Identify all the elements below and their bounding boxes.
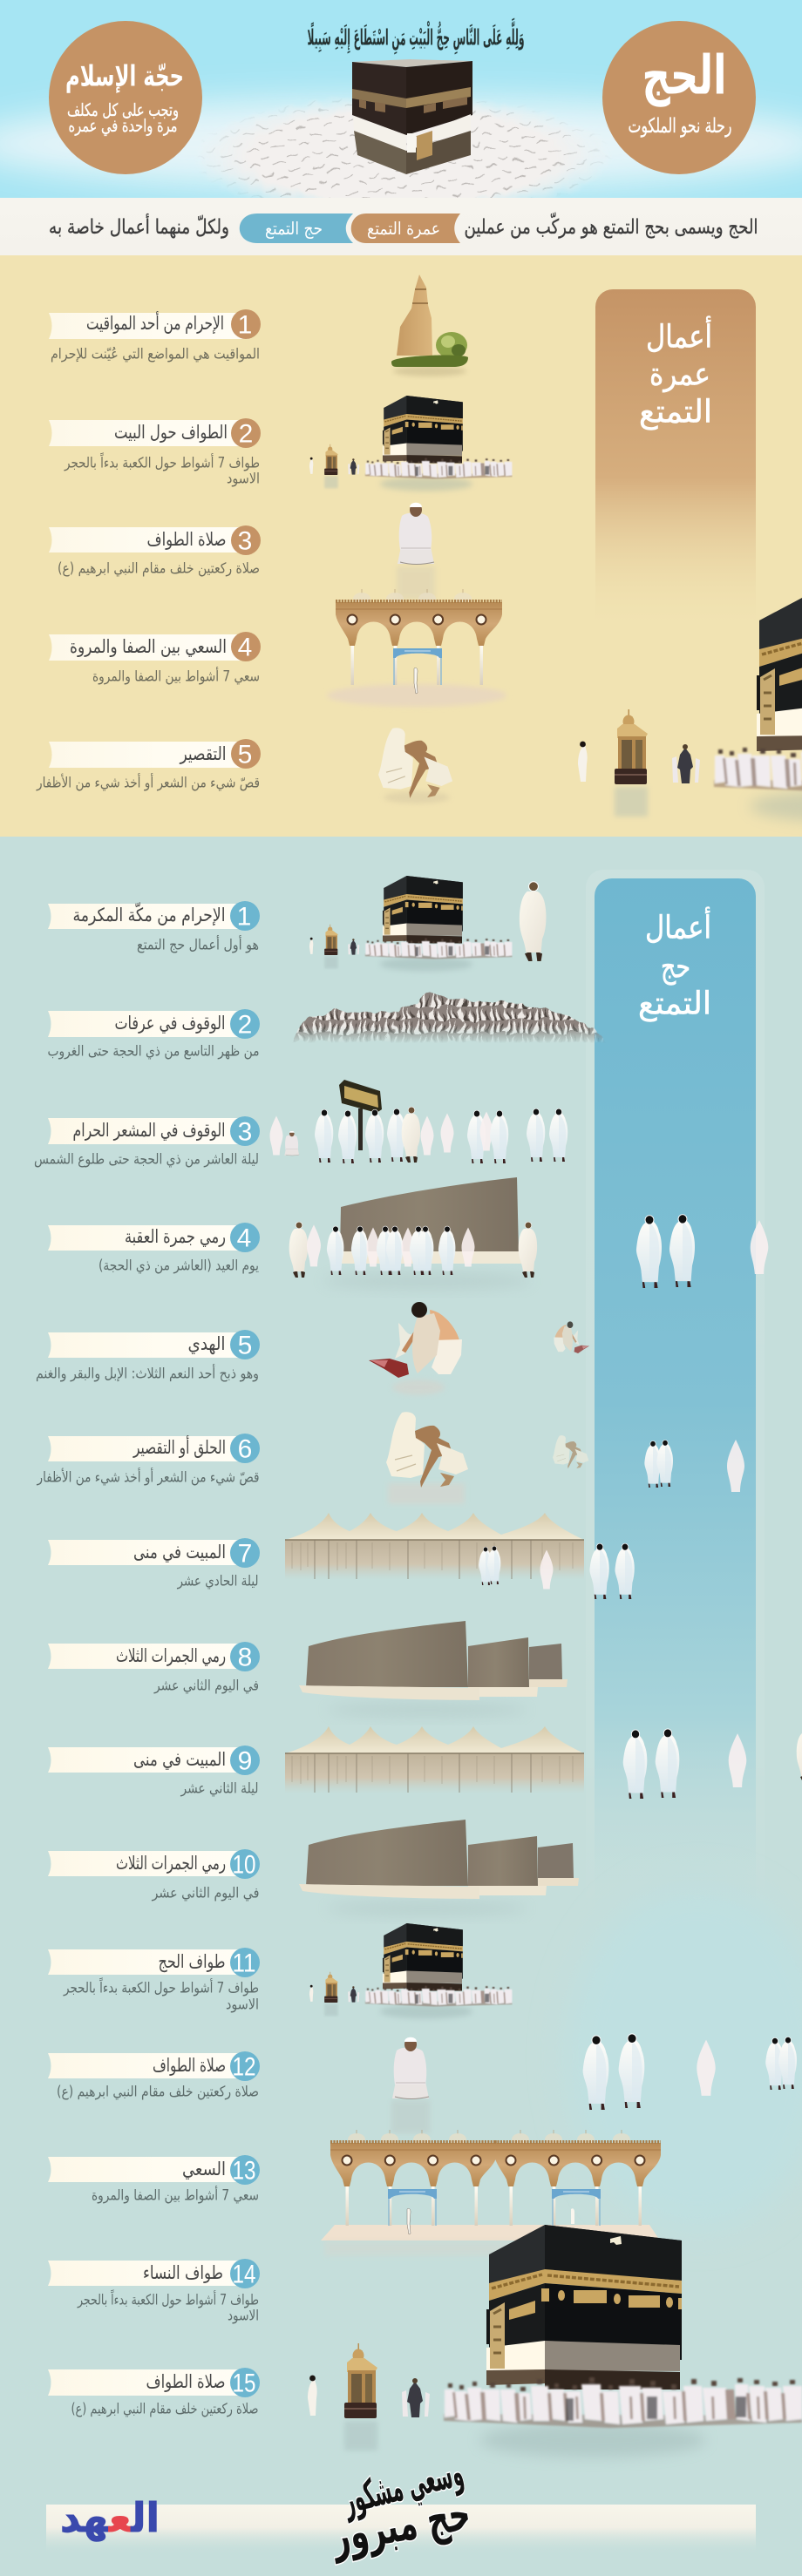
circle: Hajjat al-Islam [49,21,202,174]
step 7: 7 [238,1539,252,1569]
step 2 [49,418,261,488]
step 11: طواف الحج [159,1951,225,1972]
icon: large Kaaba with pilgrims [308,2225,802,2457]
step 14: الاسود [228,2308,259,2325]
icon: Muzdalifah sign [339,1080,382,1150]
figures: standing at Muzdalifah [270,1107,568,1163]
step 3: ليلة العاشر من ذي الحجة حتى طلوع الشمس [34,1150,259,1168]
pill: umrat al-tamattu: عمرة التمتع [367,218,440,239]
step 14: 14 [232,2261,256,2288]
step 4: السعي بين الصفا والمروة [70,636,227,657]
step 5 [36,1330,260,1382]
step 15 [48,2368,260,2417]
icon: praying man (step 12) [391,2037,430,2133]
step 1: 1 [238,310,252,340]
circle: Hajj title: الحج [642,44,727,106]
step 3: الوقوف في المشعر الحرام [73,1120,225,1141]
step 10: في اليوم الثاني عشر [152,1884,260,1901]
step 15: صلاة ركعتين خلف مقام النبي ابرهيم (ع) [71,2400,258,2417]
step 14: طواف النساء [143,2262,223,2283]
step 2: 2 [239,420,253,448]
pill: umrat al-tamattu [351,214,460,243]
icon: three Jamarat walls (step 10) [299,1820,579,1916]
step 6: 6 [238,1434,252,1464]
circle: Hajjat al-Islam: حجّة الإسلام [65,59,184,92]
panel: Hajj side panel [586,870,765,1929]
step 9 [48,1746,260,1797]
step 11: الاسود [226,1996,259,2013]
step 15: صلاة الطواف [146,2371,225,2392]
panel: Umrah side panel: التمتع [639,394,712,430]
step 12: 12 [232,2053,256,2081]
step 9: 9 [238,1746,252,1776]
icon: pilgrim walking [520,882,546,961]
pill: hajj al-tamattu: حج التمتع [265,218,323,239]
step 5: التقصير [180,743,227,764]
step 11 [48,1948,260,2013]
step 1: هو أول أعمال حج التمتع [137,934,259,953]
step 11: طواف 7 أشواط حول الكعبة بدءاً بالحجر [63,1977,259,1997]
icon: large Kaaba with pilgrims in the Umrah section [578,591,802,824]
step 7: ليلة الحادي عشر [177,1572,258,1590]
figures: pilgrims on the Hajj panel, step 9 [623,1726,802,1799]
icon: haircut (step 5) [378,728,452,803]
footer strip [46,2505,756,2555]
icon: haircut (hajj step 6) [386,1412,588,1504]
step 4: سعي 7 أشواط بين الصفا والمروة [92,666,260,685]
step 5: 5 [238,741,252,769]
icon: praying man (step 3) [397,503,435,600]
icon: small Kaaba with pilgrims (step 11) [309,1923,512,2018]
step 4 [48,1223,260,1274]
step 8: في اليوم الثاني عشر [153,1677,259,1694]
step 14: طواف 7 أشواط حول الكعبة بدءاً بالحجر [77,2289,259,2309]
pill: hajj al-tamattu [240,214,353,243]
step 4: 4 [238,633,252,662]
step 3: صلاة ركعتين خلف مقام النبي ابرهيم (ع) [58,559,260,577]
step 3: 3 [238,1117,252,1147]
step 13: 13 [232,2156,256,2186]
icon: small Kaaba with pilgrims (hajj step 1) [309,876,512,971]
calligraphy: Hajj greeting: حج مبرور [326,2485,474,2564]
step 9: ليلة الثاني عشر [180,1779,258,1797]
hajj steps [34,901,260,2417]
hero: white text strip [0,198,802,255]
step 5: قصّ شيء من الشعر أو أخذ شيء من الأظفار [36,772,260,791]
step 8: رمي الجمرات الثلاث [116,1645,226,1666]
step 2: الاسود [227,471,260,488]
step 2: من ظهر التاسع من ذي الحجة حتى الغروب [47,1042,260,1060]
step 1: الإحرام من مكّة المكرمة [73,901,225,925]
step 6: الحلق أو التقصير [133,1435,226,1458]
step 6: قصّ شيء من الشعر أو أخذ شيء من الأظفار [37,1468,260,1487]
icon: small Kaaba with pilgrims (step 2) [309,396,512,491]
icon: three Jamarat walls (step 8) [299,1621,568,1718]
step 3 [49,525,261,577]
step 3: صلاة الطواف [146,529,227,550]
step 4: يوم العيد (العاشر من ذي الحجة) [99,1257,259,1274]
icon: Mount Arafat [292,995,606,1042]
step 5 [36,739,261,791]
step 1: 1 [237,903,251,931]
intro sentence with pills: ولكلّ منهما أعمال خاصة به [49,214,229,239]
step 7 [48,1538,260,1590]
icon: Jamrat al-Aqaba wall with pilgrims [289,1177,537,1290]
step 13 [48,2155,260,2205]
step 1 [48,901,260,953]
panel: Hajj side panel: حج [661,950,690,985]
step 3: 3 [238,526,252,556]
step 8: 8 [238,1644,252,1671]
icon: sacrifice (step 5) [369,1302,589,1395]
hero: mosque floor around the Kaaba [200,99,607,198]
step 5: 5 [238,1332,252,1359]
step 2: الوقوف في عرفات [115,1013,225,1034]
circle: Hajjat al-Islam: وتجب على كل مكلف [67,99,179,120]
step 12: صلاة ركعتين خلف مقام النبي ابرهيم (ع) [57,2083,259,2100]
panel: Umrah side panel: عمرة [649,357,710,392]
circle: Hajj title: رحلة نحو الملكوت [628,115,732,138]
step 11: 11 [232,1949,256,1978]
panel: Hajj side panel: أعمال [645,906,711,946]
step 10 [48,1849,260,1901]
step 4: 4 [237,1224,251,1253]
panel: Hajj side panel: التمتع [638,986,711,1021]
step 2: طواف 7 أشواط حول الكعبة بدءاً بالحجر [64,452,260,472]
panel: Umrah side panel [595,289,756,632]
step 4: رمي جمرة العقبة [125,1226,226,1247]
step 5: الهدي [188,1333,225,1354]
step 4 [49,632,261,685]
calligraphy: Hajj greeting [326,2448,474,2564]
step 12: صلاة الطواف [153,2055,226,2076]
step 12 [48,2051,260,2100]
text: وسعي مشكور [337,2448,467,2523]
step 1: الإحرام من أحد المواقيت [86,311,224,334]
figures: pilgrims on the Hajj panel, step 6 [644,1440,744,1492]
step 5: وهو ذبح أحد النعم الثلاث: الإبل والبقر والغنم [36,1363,259,1382]
icon: Mina tents (step 7) [285,1513,584,1580]
panel: Umrah side panel: أعمال [646,315,712,356]
step 2: الطواف حول البيت [114,422,228,443]
step 13: سعي 7 أشواط بين الصفا والمروة [92,2186,259,2205]
icon: Mina tents (step 9) [285,1726,584,1793]
step 13: السعي [182,2159,226,2179]
step 10: 10 [232,1851,256,1879]
step 1 [49,309,261,363]
hero: Kaaba [352,59,472,174]
circle: Hajjat al-Islam: مرة واحدة في عمره [68,115,178,137]
step 1: المواقيت هي المواضع التي عُيّنت للإحرام [51,345,260,363]
icon: Safa and Marwa arcade (step 4) [327,589,506,707]
icon: Safa and Marwa long arcade (step 13) [321,2130,661,2256]
step 7: المبيت في منى [133,1542,226,1563]
step 2: 2 [238,1011,252,1039]
intro sentence with pills [49,213,758,243]
text: وَلِلَّهِ عَلَى النَّاسِ حِجُّ الْبَيْتِ مَنِ اسْتَطَاعَ إِلَيْهِ سَبِيلًا [307,17,525,55]
figures: pilgrims on the Hajj panel, upper [636,1215,768,1288]
step 10: رمي الجمرات الثلاث [116,1853,226,1874]
icon: miqat minaret [391,275,468,376]
step 6 [37,1434,260,1487]
step 3 [34,1116,260,1168]
umrah steps [36,309,261,791]
step 2 [47,1009,260,1060]
step 14 [48,2259,260,2325]
step 8 [48,1642,260,1694]
figures: pilgrims at the Mina tents [479,1543,635,1599]
circle: Hajj title [602,21,756,174]
figures: pilgrims at step 12 [583,2034,797,2110]
step 9: المبيت في منى [133,1749,226,1770]
logo: Al-Ahed: العهد [60,2494,160,2541]
step 15: 15 [232,2369,256,2398]
